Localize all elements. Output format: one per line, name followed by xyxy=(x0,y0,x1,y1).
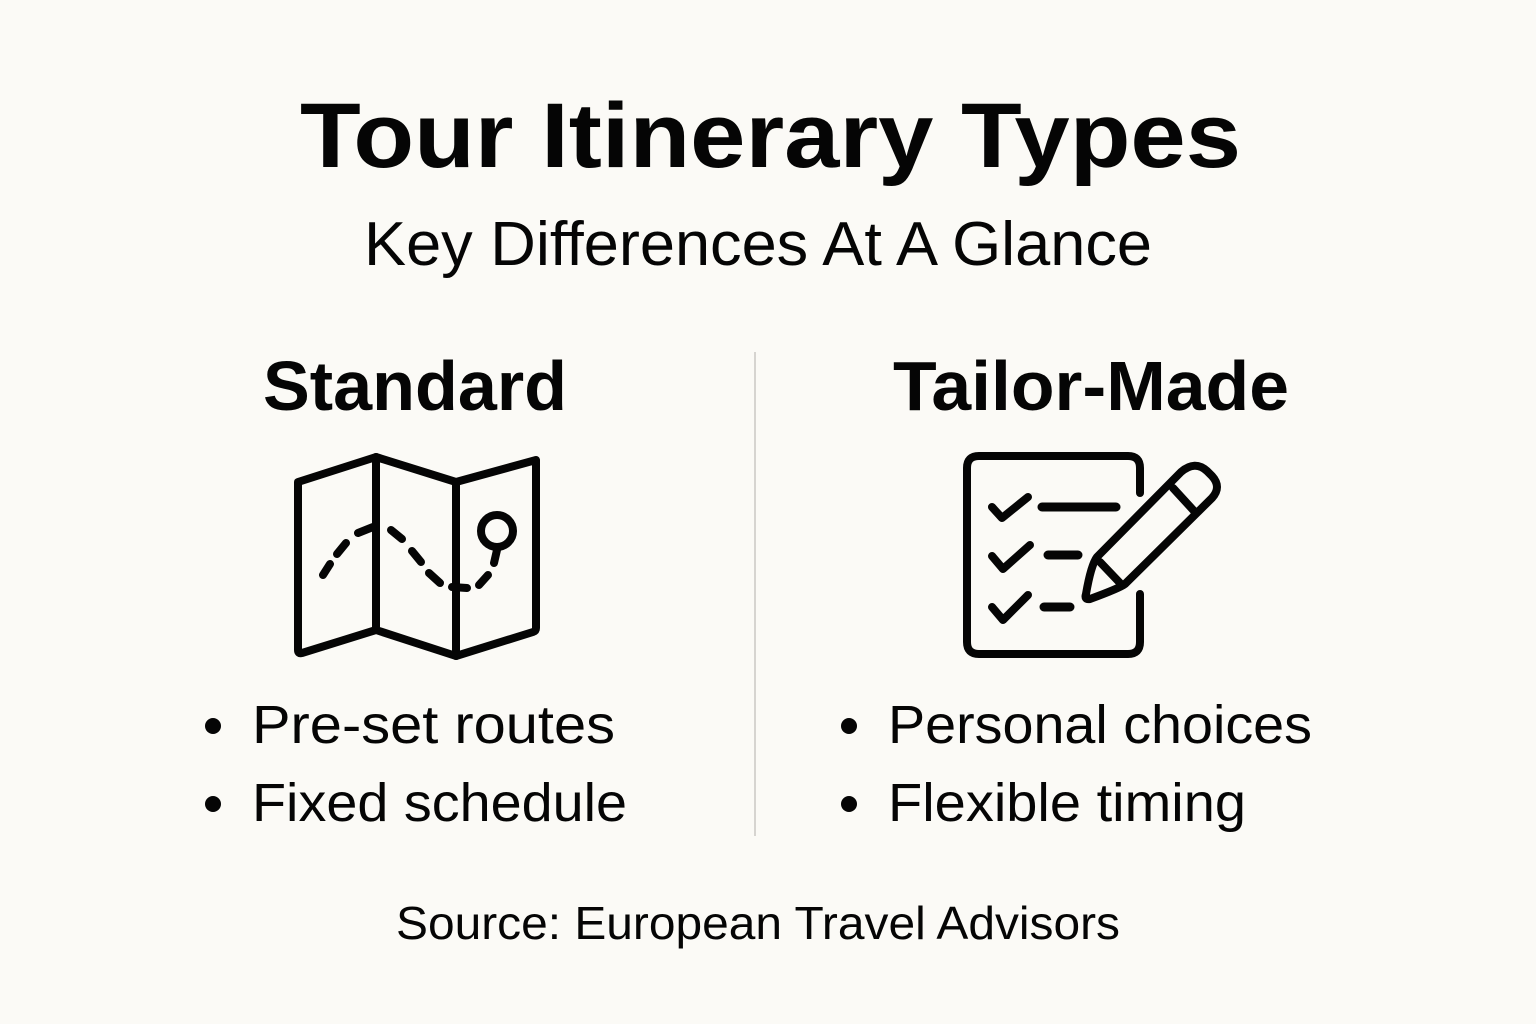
heading: standard: Standard xyxy=(263,347,567,425)
heading: tailor-made: Tailor-Made xyxy=(893,347,1289,425)
subtitle: Key Differences At A Glance xyxy=(364,210,1152,279)
bullet list: tailor-made xyxy=(841,695,1312,833)
bullet list: tailor-made: Personal choices xyxy=(888,695,1312,755)
icon: folded map with route xyxy=(298,457,536,656)
bullet list: standard: Pre-set routes xyxy=(252,695,615,755)
panel: tailor-made xyxy=(841,347,1312,833)
panel: standard xyxy=(205,347,627,833)
bullet list: standard xyxy=(205,695,627,833)
source note: Source: European Travel Advisors xyxy=(396,897,1120,949)
title: Tour Itinerary Types xyxy=(300,85,1241,187)
bullet list: tailor-made: Flexible timing xyxy=(888,773,1246,833)
icon: checklist with pencil xyxy=(967,456,1217,654)
bullet list: standard: Fixed schedule xyxy=(252,773,627,833)
